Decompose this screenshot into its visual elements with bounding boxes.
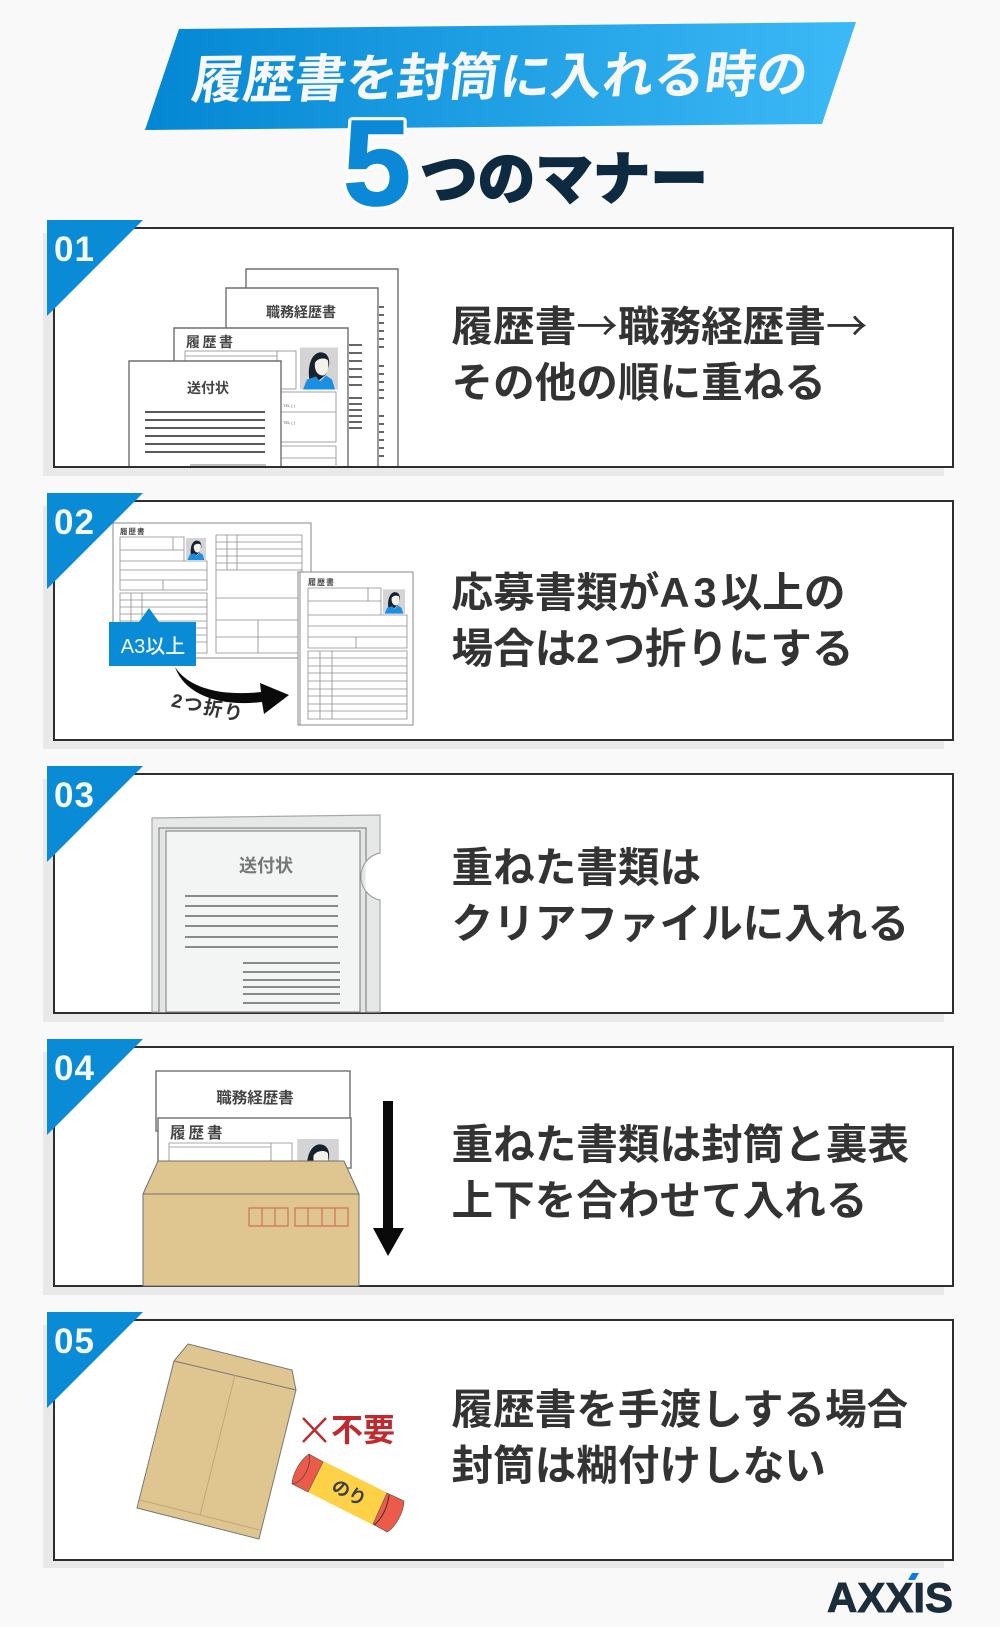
callout: A3以上	[109, 608, 196, 666]
icon: glue stick	[292, 1454, 404, 1532]
number badge 01: 01	[54, 230, 95, 269]
number badge 02	[47, 493, 143, 589]
icon: glue stick: のり	[328, 1476, 370, 1510]
number badge 05	[47, 1312, 143, 1408]
illustration: stacked documents: 職務経歴書	[266, 304, 336, 320]
title banner: 履歴書を封筒に入れる時の	[189, 45, 812, 109]
panel 5 text: 封筒は糊付けしない	[452, 1442, 826, 1489]
title banner	[145, 22, 856, 130]
number badge 04	[47, 1039, 143, 1135]
label: 2つ折り: 2つ折り	[170, 690, 246, 726]
number badge 03: 03	[54, 776, 95, 815]
panel 3 text: クリアファイルに入れる	[452, 900, 909, 947]
panel 2 text: 応募書類がA3以上の	[452, 569, 845, 616]
illustration: documents into envelope: 履歴書	[170, 1123, 226, 1142]
panel 1 text: 履歴書→職務経歴書→	[452, 293, 868, 353]
not needed mark	[303, 1412, 395, 1448]
panel 2	[43, 493, 953, 749]
number badge 04: 04	[54, 1049, 95, 1088]
subtitle: 5: 5	[343, 95, 411, 231]
illustration: stacked documents	[129, 269, 398, 467]
number badge 02: 02	[54, 503, 95, 542]
panel 4 text: 重ねた書類は封筒と裏表	[452, 1121, 909, 1168]
subtitle: 5: 5	[343, 95, 411, 231]
illustration: stacked documents: 送付状	[187, 380, 229, 396]
arrow: fold	[175, 667, 289, 714]
panel 5	[43, 1312, 953, 1568]
callout: A3以上: A3以上	[121, 635, 185, 658]
illustration: envelope	[137, 1344, 296, 1539]
panel 3	[43, 766, 953, 1022]
number badge 01	[47, 220, 143, 316]
illustration: stacked documents: TEL ( )	[283, 420, 296, 425]
illustration: folded sheet	[298, 572, 413, 725]
panel 2 text: 場合は2つ折りにする	[452, 625, 853, 672]
number badge 05: 05	[54, 1322, 95, 1361]
subtitle: つのマナー: つのマナー	[420, 132, 708, 216]
illustration: stacked documents: 履歴書	[186, 334, 236, 350]
panel 1	[43, 220, 953, 476]
illustration: documents into envelope: 職務経歴書	[216, 1088, 294, 1107]
arrow: down	[373, 1101, 404, 1256]
illustration: A3 spread sheet: 履歴書	[120, 526, 146, 536]
illustration: stacked documents: TEL ( )	[283, 403, 296, 408]
illustration: clear file: 送付状	[239, 856, 293, 876]
illustration: A3 spread sheet	[113, 523, 311, 658]
panel 1 text: その他の順に重ねる	[452, 359, 826, 406]
logo: AXXIS: AXXIS	[827, 1574, 953, 1621]
panel 4	[43, 1039, 953, 1295]
panel 4 text: 上下を合わせて入れる	[452, 1177, 867, 1224]
not needed mark: 不要	[331, 1412, 395, 1448]
illustration: folded sheet: 履歴書	[308, 577, 335, 587]
panel 3 text: 重ねた書類は	[452, 844, 701, 891]
illustration: clear file	[152, 815, 380, 1012]
panel 5 text: 履歴書を手渡しする場合	[452, 1386, 908, 1433]
number badge 03	[47, 766, 143, 862]
illustration: documents into envelope	[143, 1071, 359, 1286]
